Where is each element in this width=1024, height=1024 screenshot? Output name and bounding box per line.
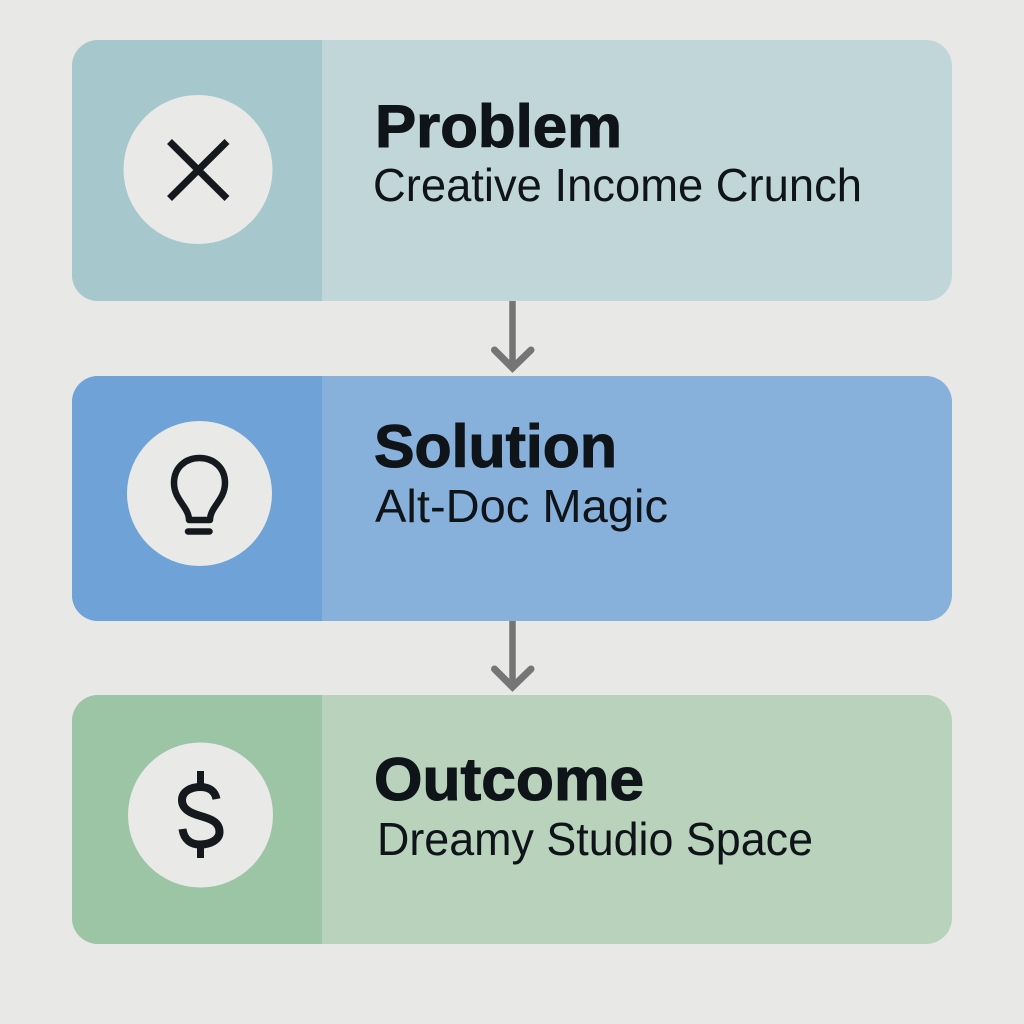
icon: x mark bbox=[170, 142, 227, 198]
outcome icon column bbox=[72, 695, 322, 944]
solution subtitle: Alt-Doc Magic bbox=[375, 480, 668, 532]
outcome subtitle: Dreamy Studio Space bbox=[377, 813, 813, 865]
arrow: solution to outcome bbox=[494, 621, 531, 687]
panel: problem bbox=[72, 40, 952, 301]
panel: solution bbox=[72, 376, 952, 621]
icon: dollar sign bbox=[182, 771, 220, 858]
solution heading: Solution bbox=[374, 413, 617, 480]
icon: light bulb bbox=[174, 458, 225, 532]
outcome heading: Outcome bbox=[374, 746, 644, 813]
outcome icon circle bbox=[128, 742, 273, 888]
arrow: problem to solution bbox=[494, 301, 531, 368]
solution icon circle bbox=[127, 421, 272, 566]
problem icon column bbox=[72, 40, 322, 301]
problem subtitle: Creative Income Crunch bbox=[373, 159, 862, 211]
problem heading: Problem bbox=[375, 93, 622, 160]
solution icon column bbox=[72, 376, 322, 621]
panel: outcome bbox=[72, 695, 952, 944]
problem icon circle bbox=[124, 95, 272, 244]
